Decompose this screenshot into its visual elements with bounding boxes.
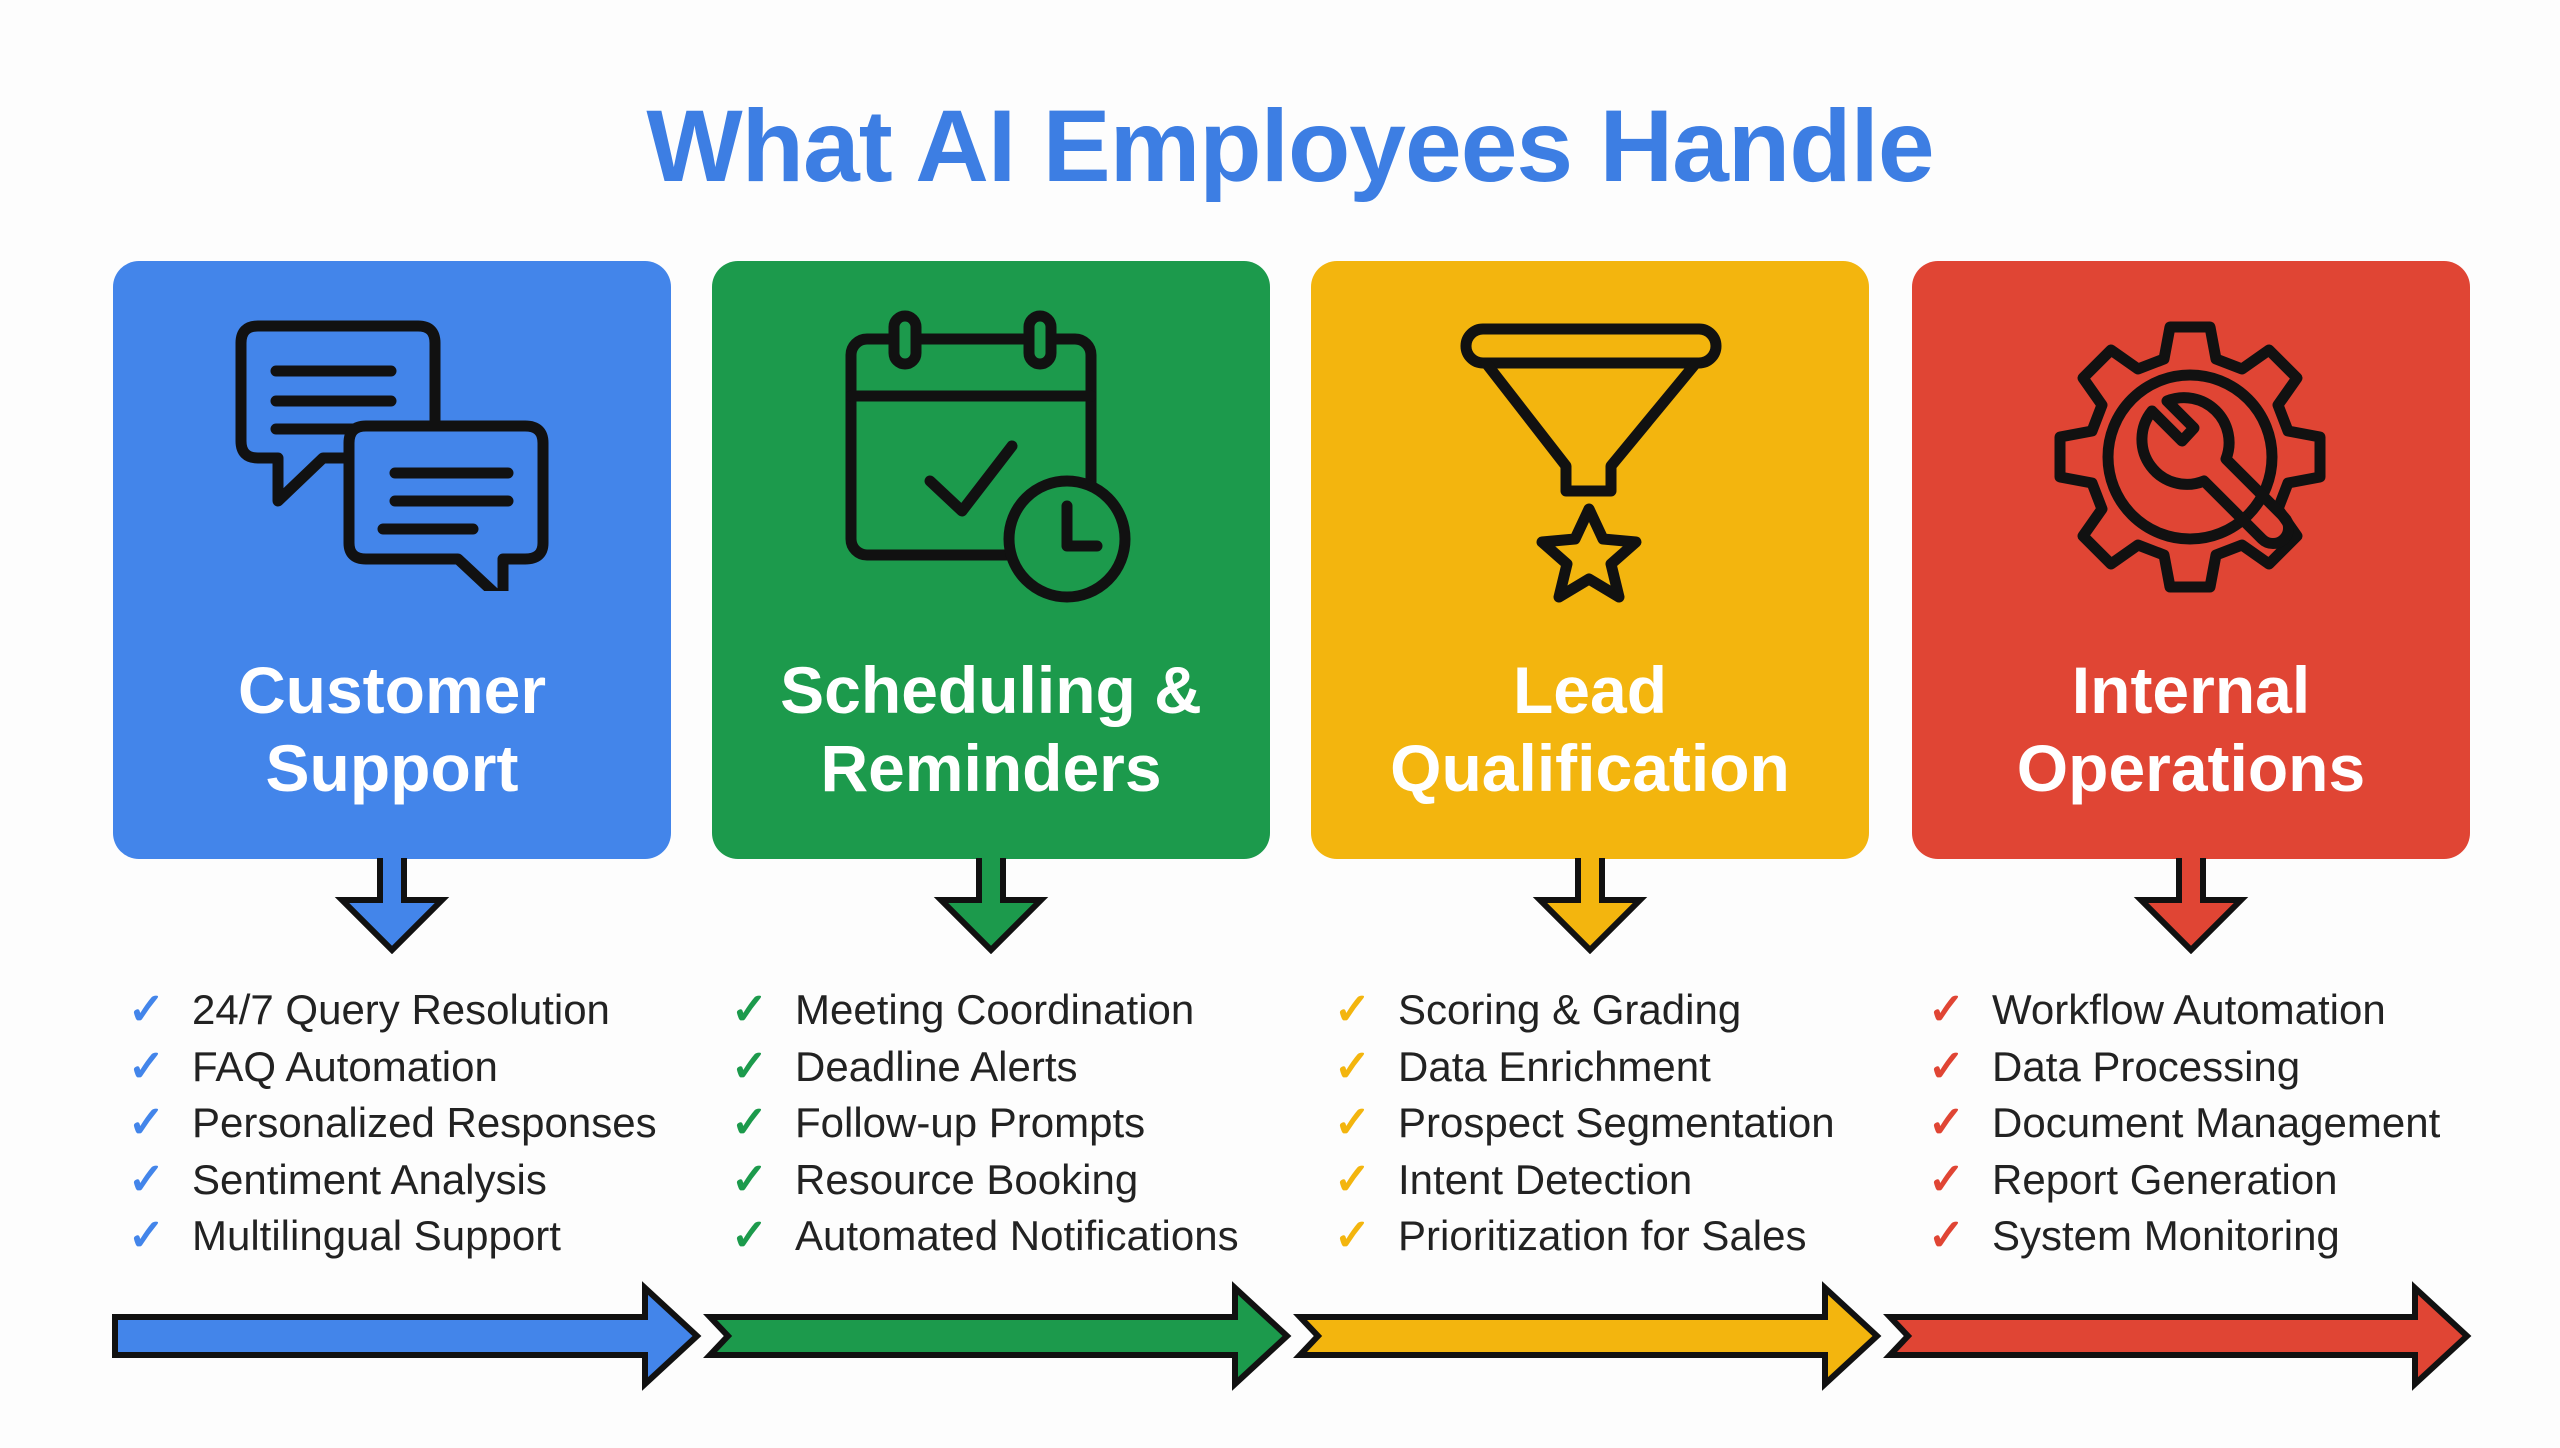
list: scheduling: Resource Booking <box>795 1156 1138 1202</box>
icon: chat bubbles <box>236 320 548 591</box>
icon: calendar with clock <box>846 310 1130 602</box>
arrow: down green <box>934 858 1048 954</box>
list: lead qualification: Prospect Segmentation <box>1398 1099 1835 1146</box>
list: customer support: FAQ Automation <box>192 1042 498 1090</box>
list: lead qualification: Intent Detection <box>1398 1156 1692 1202</box>
list: scheduling: ✓ <box>731 1098 768 1147</box>
list: lead qualification: ✓ <box>1334 1154 1371 1204</box>
list: internal operations: Workflow Automation <box>1992 986 2386 1033</box>
icon: funnel with star <box>1460 324 1722 602</box>
list: lead qualification <box>1334 985 1835 1260</box>
list: scheduling: ✓ <box>731 1154 768 1204</box>
panel: customer support <box>113 261 671 859</box>
list: internal operations: Data Processing <box>1992 1042 2300 1090</box>
list: lead qualification: Scoring & Grading <box>1398 986 1741 1033</box>
list: scheduling: Automated Notifications <box>795 1212 1239 1259</box>
panel title <box>238 653 546 805</box>
list: lead qualification: ✓ <box>1334 1042 1371 1090</box>
panel title <box>2017 653 2365 805</box>
list: lead qualification: Data Enrichment <box>1398 1042 1711 1090</box>
arrow: down blue <box>334 858 450 954</box>
list: customer support: ✓ <box>128 1098 165 1147</box>
panel title: Support <box>266 731 518 805</box>
list: customer support: ✓ <box>128 1211 165 1260</box>
list: internal operations: Report Generation <box>1992 1156 2338 1202</box>
panel title <box>780 653 1202 805</box>
panel title: Customer <box>238 653 546 727</box>
panel title: Operations <box>2017 731 2365 805</box>
panel: internal operations <box>1912 261 2470 859</box>
panel: scheduling <box>712 261 1270 859</box>
panel title: Scheduling & <box>780 653 1202 727</box>
list: scheduling: Meeting Coordination <box>795 986 1194 1033</box>
list: internal operations: Document Management <box>1992 1099 2440 1146</box>
list: customer support <box>128 985 657 1260</box>
panel title: Lead <box>1513 653 1667 727</box>
arrow: down red <box>2134 858 2248 954</box>
list: internal operations: ✓ <box>1928 985 1965 1034</box>
list: scheduling <box>731 985 1239 1260</box>
title: What AI Employees Handle <box>646 89 1934 203</box>
panel title <box>1390 653 1790 805</box>
list: internal operations: ✓ <box>1928 1042 1965 1090</box>
list: scheduling: Follow-up Prompts <box>795 1099 1145 1146</box>
list: internal operations: ✓ <box>1928 1098 1965 1147</box>
panel: lead qualification <box>1311 261 1869 859</box>
list: scheduling: Deadline Alerts <box>795 1042 1078 1090</box>
list: internal operations: ✓ <box>1928 1154 1965 1204</box>
list: lead qualification: ✓ <box>1334 1098 1371 1147</box>
list: scheduling: ✓ <box>731 985 768 1034</box>
list: customer support: ✓ <box>128 1042 165 1090</box>
list: customer support: ✓ <box>128 985 165 1034</box>
list: scheduling: ✓ <box>731 1042 768 1090</box>
list: internal operations <box>1928 985 2440 1260</box>
list: internal operations: System Monitoring <box>1992 1212 2340 1259</box>
icon: gear with wrench <box>2054 322 2326 592</box>
list: lead qualification: ✓ <box>1334 1211 1371 1260</box>
list: customer support: Sentiment Analysis <box>192 1156 547 1202</box>
list: lead qualification: ✓ <box>1334 985 1371 1034</box>
list: customer support: Personalized Responses <box>192 1099 657 1146</box>
arrow: down yellow <box>1532 858 1648 954</box>
list: customer support: 24/7 Query Resolution <box>192 986 610 1033</box>
list: customer support: Multilingual Support <box>192 1212 561 1259</box>
panel title: Internal <box>2072 653 2310 727</box>
list: scheduling: ✓ <box>731 1211 768 1260</box>
list: internal operations: ✓ <box>1928 1211 1965 1260</box>
list: customer support: ✓ <box>128 1154 165 1204</box>
arrow: bottom flow <box>112 1281 2472 1391</box>
list: lead qualification: Prioritization for Sales <box>1398 1212 1806 1259</box>
panel title: Qualification <box>1390 731 1790 805</box>
panel title: Reminders <box>820 731 1162 805</box>
